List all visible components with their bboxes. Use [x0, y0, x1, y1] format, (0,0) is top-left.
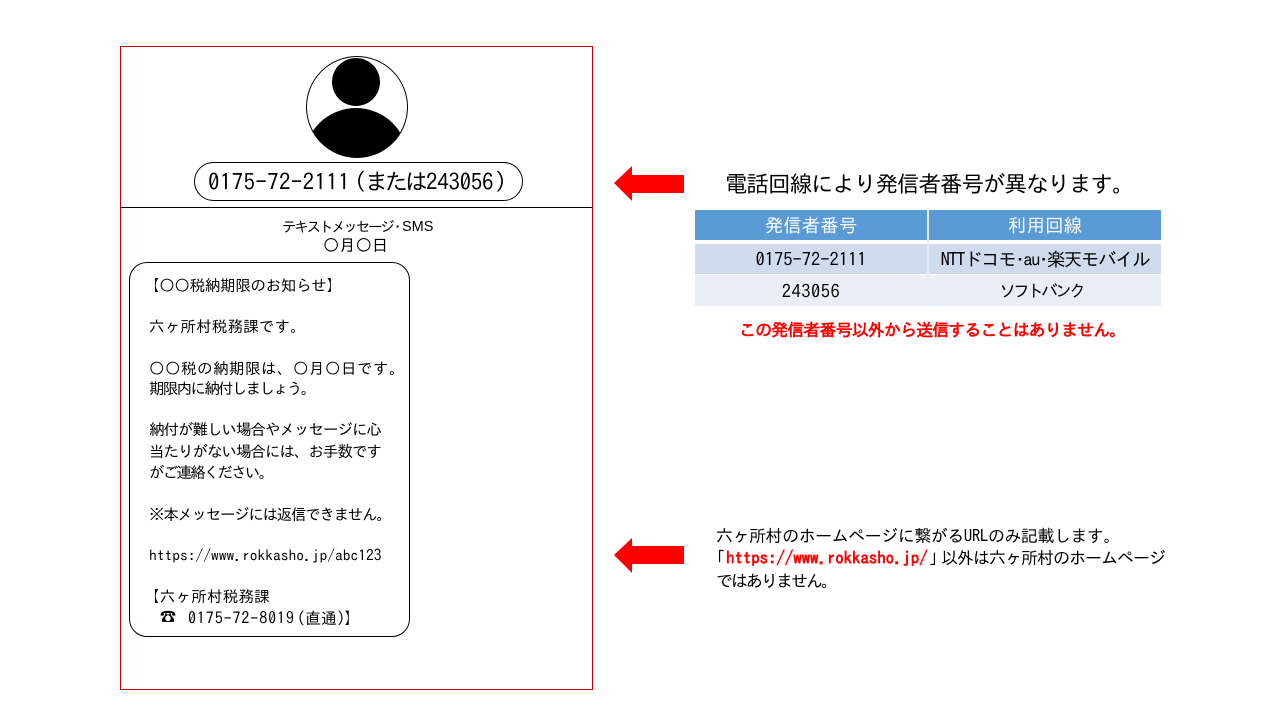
sender number pill	[194, 162, 523, 201]
heading: sender number differs: 電話回線により発信者番号が異なります。	[725, 172, 1134, 195]
message body text: ☎	[160, 609, 176, 626]
red warning text: この発信者番号以外から送信することはありません。	[739, 322, 1125, 339]
sender number text: ）	[495, 170, 518, 193]
table header: 利用回線	[1008, 217, 1082, 235]
divider line	[121, 207, 592, 208]
message body text: ○○税の納期限は、○月○日です。	[149, 360, 405, 376]
URL explanation text: https://www.rokkasho.jp/	[726, 550, 928, 567]
message date: ○月○日	[323, 237, 388, 253]
message heading	[282, 219, 433, 235]
message body text: 当たりがない場合には、お手数です	[149, 443, 381, 459]
URL explanation text: 以外は六ヶ所村のホームページ	[941, 550, 1165, 567]
message heading: SMS	[402, 219, 433, 235]
message body text: 【○○税納期限のお知らせ】	[144, 277, 342, 293]
message body text: https://www.rokkasho.jp/abc123	[149, 547, 382, 563]
URL explanation text: 六ヶ所村のホームページに繋がるURLのみ記載します。	[716, 528, 1120, 545]
message body text: 】	[344, 610, 360, 626]
sender number text	[208, 170, 518, 193]
arrow: to sender number	[614, 166, 684, 201]
message body text	[144, 277, 405, 626]
row: 243056: 243056	[782, 283, 840, 301]
row: 0175-72-2111: 0175-72-2111	[756, 251, 866, 269]
sender number text: （	[343, 170, 366, 193]
row: 0175-72-2111	[695, 244, 1161, 274]
column divider	[927, 210, 929, 306]
URL explanation text: 「	[708, 550, 725, 567]
message heading: テキストメッセージ	[282, 219, 393, 234]
icon: sender avatar	[306, 56, 408, 158]
row: 0175-72-2111: NTTドコモ･au･楽天モバイル	[941, 251, 1149, 269]
table: sender numbers by carrier	[695, 210, 1161, 306]
message body text: 期限内に納付しましょう。	[149, 380, 315, 396]
message body text: 納付が難しい場合やメッセージに心	[149, 421, 381, 437]
message bubble	[129, 262, 410, 637]
message body text: （直通）	[289, 610, 353, 626]
URL explanation text	[708, 528, 1165, 590]
table header: 発信者番号	[765, 217, 857, 235]
URL explanation text: 」	[929, 550, 946, 567]
table header	[695, 210, 1161, 240]
arrow: to URL	[614, 538, 684, 573]
message body text: 0175-72-8019	[188, 610, 295, 626]
row: 243056: ソフトバンク	[999, 283, 1083, 300]
sender number text: 243056	[426, 170, 493, 193]
sender number text: または	[365, 170, 425, 193]
message body text: 六ヶ所村税務課です。	[149, 318, 306, 334]
sender number text: 0175-72-2111	[208, 170, 350, 193]
message body text: がご連絡ください。	[149, 464, 272, 480]
message body text: 【六ヶ所村税務課	[144, 588, 270, 604]
row: 243056	[695, 275, 1161, 306]
message heading: ･	[394, 219, 401, 234]
message body text: ※本メッセージには返信できません。	[149, 506, 390, 522]
panel: phone screen mock-up	[120, 46, 593, 690]
URL explanation text: ではありません。	[716, 573, 836, 590]
